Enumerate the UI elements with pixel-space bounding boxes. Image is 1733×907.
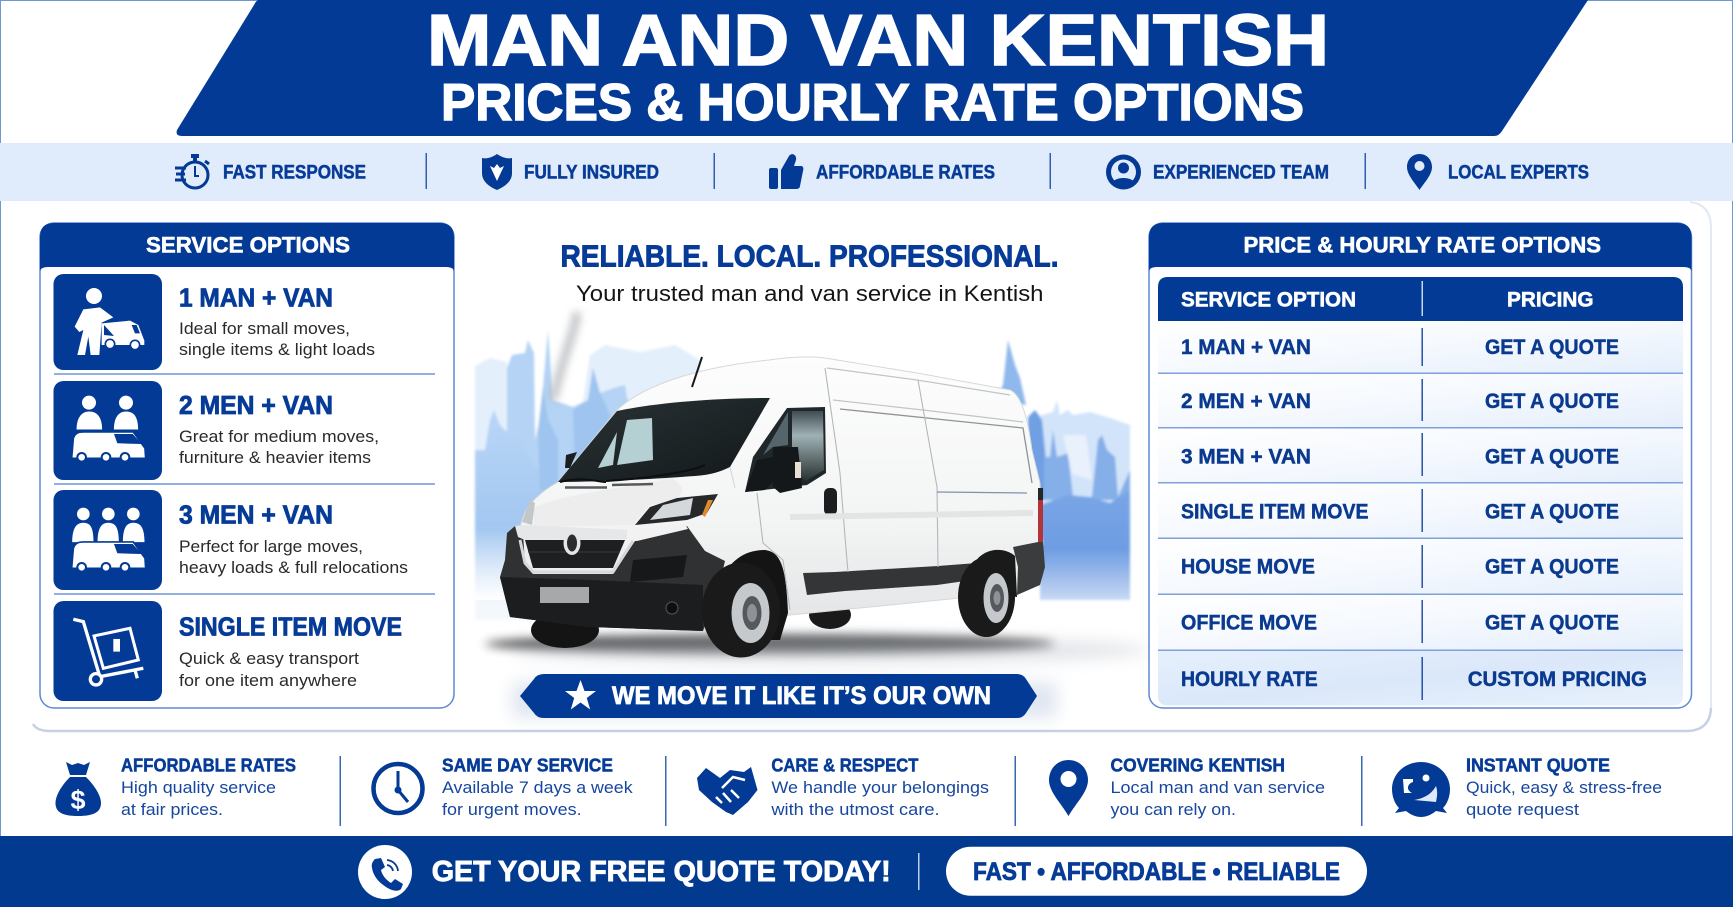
side window: [745, 407, 826, 492]
row: 2 men and van: [54, 381, 379, 480]
title banner: [177, 0, 1588, 136]
tagline: Your trusted man and van service in Kentish: [576, 281, 1044, 306]
icon: money bag: [56, 762, 101, 816]
heading: reliable local professional: RELIABLE. LOCAL. PROFESSIONAL.: [560, 239, 1058, 274]
row: single item move: Quick & easy transport: [179, 649, 359, 668]
feature: instant quote: Quick, easy & stress-free: [1466, 778, 1662, 797]
label: affordable rates: AFFORDABLE RATES: [816, 162, 995, 184]
row: single item move: for one item anywhere: [179, 671, 357, 690]
panel: service options: [40, 223, 454, 708]
icon: clock: [374, 764, 422, 813]
row: hourly rate: HOURLY RATE: [1181, 668, 1318, 691]
icon: chat bubbles: [1392, 762, 1450, 817]
subtitle: PRICES & HOURLY RATE OPTIONS: [441, 74, 1304, 132]
row: house move: GET A QUOTE: [1485, 555, 1619, 578]
feature: instant quote: INSTANT QUOTE: [1466, 755, 1610, 776]
row: 1 man and van: single items & light loads: [179, 340, 375, 359]
wiper: [560, 465, 705, 482]
row: 3 men and van: heavy loads & full relocations: [179, 558, 408, 577]
row: 3 men: [1181, 445, 1619, 468]
row: hourly rate: [1181, 668, 1647, 691]
row: hourly rate: CUSTOM PRICING: [1468, 668, 1647, 691]
rear bumper: [1013, 542, 1045, 595]
feature: care and respect: [697, 755, 989, 819]
feature: covering kentish: Local man and van service: [1110, 778, 1325, 797]
icon: one man and van: [54, 274, 162, 370]
rear light: [1038, 488, 1043, 542]
benefits strip: [0, 143, 1733, 201]
icon: money bag: $: [70, 785, 86, 815]
inner wheels: [531, 612, 599, 648]
label: fully insured: FULLY INSURED: [524, 162, 659, 184]
row: 3 men and van: 3 MEN + VAN: [179, 499, 333, 529]
row: 1 man and van: [54, 274, 375, 370]
row: office move: OFFICE MOVE: [1181, 611, 1317, 634]
hood vents: [565, 484, 653, 488]
row: 2 men and van: 2 MEN + VAN: [179, 390, 333, 420]
table header: SERVICE OPTION: [1181, 288, 1356, 312]
feature: covering kentish: [1049, 755, 1325, 819]
heading: service options: SERVICE OPTIONS: [146, 233, 350, 258]
row: single item: [1181, 500, 1619, 523]
row: office move: GET A QUOTE: [1485, 611, 1619, 634]
row: house move: [1181, 555, 1619, 578]
icon: team member: [1106, 154, 1141, 190]
feature: covering kentish: COVERING KENTISH: [1110, 755, 1285, 776]
footer bar: [0, 836, 1733, 907]
illustration: white van: [485, 357, 1150, 663]
side strip: [803, 563, 977, 595]
label: fast response: FAST RESPONSE: [223, 162, 366, 184]
label: experienced team: EXPERIENCED TEAM: [1153, 162, 1329, 184]
feature: affordable rates: High quality service: [121, 778, 276, 797]
heading: price options: PRICE & HOURLY RATE OPTIONS: [1244, 233, 1601, 258]
row: 1 man and van: 1 MAN + VAN: [179, 283, 333, 313]
feature: care and respect: We handle your belongings: [771, 778, 989, 797]
feature: instant quote: [1392, 755, 1662, 819]
icon: star: [565, 680, 596, 710]
row: 1 man and van: Ideal for small moves,: [179, 319, 350, 338]
table: pricing: [1158, 277, 1683, 706]
left mirror: [565, 452, 577, 468]
main title: MAN AND VAN KENTISH: [427, 1, 1329, 81]
panel lines: [827, 368, 1023, 422]
row: single item: GET A QUOTE: [1485, 500, 1619, 523]
windscreen: [558, 398, 770, 482]
icon: two men and van: [54, 381, 162, 480]
call to action: GET YOUR FREE QUOTE TODAY!: [432, 856, 891, 888]
feature: same day service: Available 7 days a week: [442, 778, 633, 797]
front bumper: [500, 526, 725, 631]
row: 2 men: [1181, 390, 1619, 413]
row: 3 men: 3 MEN + VAN: [1181, 445, 1311, 468]
wheel arches: [720, 550, 788, 640]
row: 3 men: GET A QUOTE: [1485, 445, 1619, 468]
pill: fast affordable reliable: [946, 847, 1367, 896]
feature: care and respect: with the utmost care.: [770, 800, 940, 819]
body: [510, 357, 1043, 630]
row: 1 man: GET A QUOTE: [1485, 336, 1619, 359]
row: 1 man: [1181, 336, 1619, 359]
icon: handshake: [697, 767, 758, 815]
icon: shield: [482, 154, 512, 190]
front wheel: [702, 562, 780, 658]
row: 3 men and van: [54, 490, 408, 590]
feature: same day service: for urgent moves.: [442, 800, 582, 819]
features row: [56, 755, 1662, 826]
row: 3 men and van: Perfect for large moves,: [179, 537, 363, 556]
grille: [525, 540, 625, 568]
icon: phone: [358, 845, 412, 899]
row: single item move: SINGLE ITEM MOVE: [179, 612, 402, 642]
panel: van hero: [472, 239, 1150, 718]
feature: affordable rates: at fair prices.: [121, 800, 223, 819]
icon: hand truck: [54, 601, 162, 701]
skyline background: [475, 330, 1130, 620]
row: 2 men: GET A QUOTE: [1485, 390, 1619, 413]
banner: we move it: [520, 674, 1037, 718]
rear wheel: [958, 557, 1015, 637]
row: single item move: [54, 601, 402, 701]
hood shading: [534, 478, 682, 527]
door handle: [824, 488, 837, 515]
row: office move: [1181, 611, 1619, 634]
icon: location pin: [1049, 760, 1088, 816]
icon: thumbs up: [769, 154, 803, 189]
antenna: [692, 357, 702, 387]
door mirror: [745, 447, 802, 493]
main content panel outline: [33, 202, 1711, 731]
row: 1 man: 1 MAN + VAN: [1181, 336, 1311, 359]
feature: covering kentish: you can rely on.: [1110, 800, 1236, 819]
table header: [1158, 277, 1683, 321]
row: house move: HOUSE MOVE: [1181, 555, 1315, 578]
skyline fade left: [472, 530, 572, 600]
panel: price and hourly rate options: [1149, 223, 1692, 708]
chrome bar: [515, 525, 628, 540]
number plate: [540, 587, 589, 603]
skyline fade right: [1020, 548, 1135, 628]
icon: three men and van: [54, 490, 162, 590]
row: 2 men and van: furniture & heavier items: [179, 448, 371, 467]
icon: location pin: [1407, 154, 1432, 190]
fog recess: [630, 555, 687, 582]
row: 2 men and van: Great for medium moves,: [179, 427, 379, 446]
feature: affordable rates: [56, 755, 296, 819]
feature: same day service: SAME DAY SERVICE: [442, 755, 613, 776]
headlights: [635, 494, 718, 525]
smoke smudge: [553, 312, 577, 400]
icon: stopwatch: [175, 154, 209, 188]
ground shadow: [485, 635, 1055, 653]
pill: fast affordable reliable: FAST • AFFORDABLE • RELIABLE: [973, 858, 1340, 886]
label: local experts: LOCAL EXPERTS: [1448, 162, 1589, 184]
feature: affordable rates: AFFORDABLE RATES: [121, 755, 296, 776]
feature: instant quote: quote request: [1466, 800, 1579, 819]
row: single item: SINGLE ITEM MOVE: [1181, 500, 1368, 523]
feature: care and respect: CARE & RESPECT: [771, 755, 919, 776]
table header: PRICING: [1507, 288, 1594, 312]
row: 2 men: 2 MEN + VAN: [1181, 390, 1311, 413]
banner: we move it: WE MOVE IT LIKE IT’S OUR OWN: [612, 682, 991, 710]
feature: same day service: [374, 755, 633, 819]
banner smudge: [512, 682, 1057, 718]
